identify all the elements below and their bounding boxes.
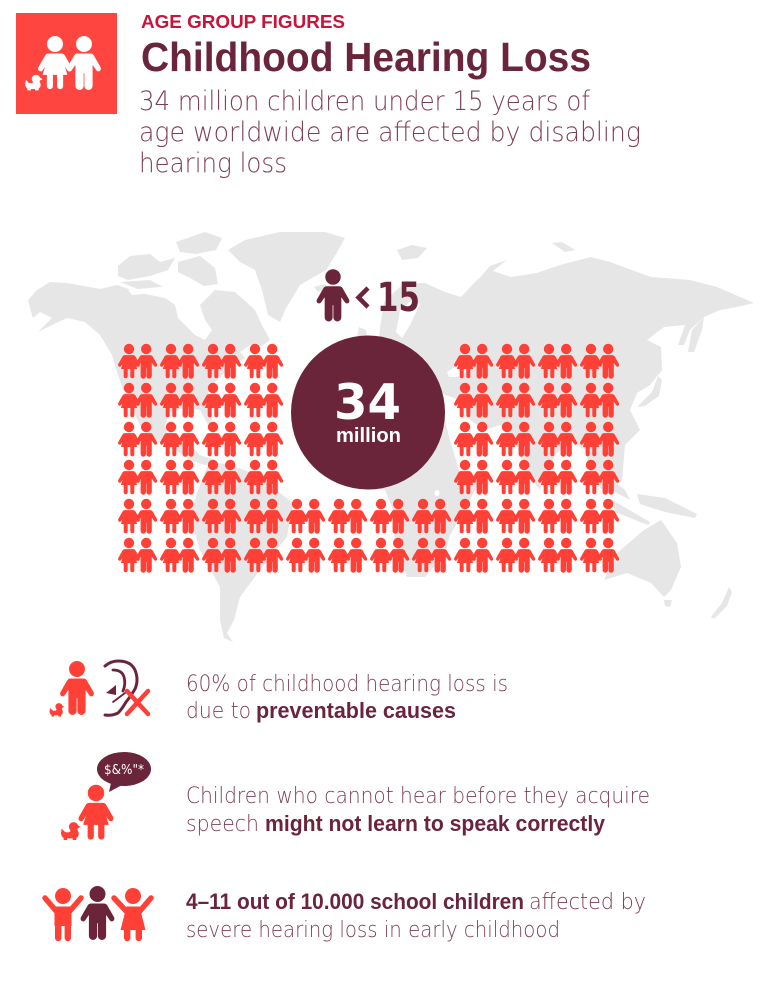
text: school children: affected by [529, 889, 646, 915]
text: preventable causes [186, 671, 508, 724]
central circle: 34 million [291, 336, 445, 490]
subtitle text: hearing loss [139, 148, 287, 179]
text: speech: Children who cannot hear before they acquire [186, 783, 650, 809]
under 15 age label: 15 [377, 275, 420, 321]
icon: child with speech bubble [61, 752, 151, 840]
icon: red square with children [16, 13, 117, 114]
world map [28, 232, 754, 642]
subtitle text: 34 million children under 15 years of [139, 86, 590, 117]
text: school children: 4–11 out of 10.000 school children [186, 889, 524, 914]
text: speech: might not learn to speak correctly [265, 811, 605, 836]
central circle: 34 million: 34 [334, 374, 401, 431]
text: speech [186, 783, 650, 837]
heading: age group figures: AGE GROUP FIGURES [141, 12, 345, 32]
text: preventable causes: 60% of childhood hearing loss is [186, 671, 508, 697]
map inland seas [128, 286, 468, 496]
icon: child with speech bubble: $&%"* [104, 763, 144, 778]
subtitle text: age worldwide are affected by disabling [139, 117, 641, 148]
icon: child, toy and crossed-out ear [50, 661, 148, 716]
text: speech: speech [186, 811, 259, 837]
text: preventable causes: due to [186, 698, 251, 724]
under 15 age label [317, 270, 420, 321]
text: preventable causes: preventable causes [256, 698, 456, 723]
subtitle text [139, 86, 641, 179]
pictogram grid of children [118, 344, 619, 572]
icon: three children [45, 887, 151, 941]
text: school children [186, 889, 646, 943]
text: school children: severe hearing loss in early childhood [186, 917, 560, 943]
central circle: 34 million: million [336, 425, 401, 447]
title: Childhood Hearing Loss [141, 34, 591, 80]
